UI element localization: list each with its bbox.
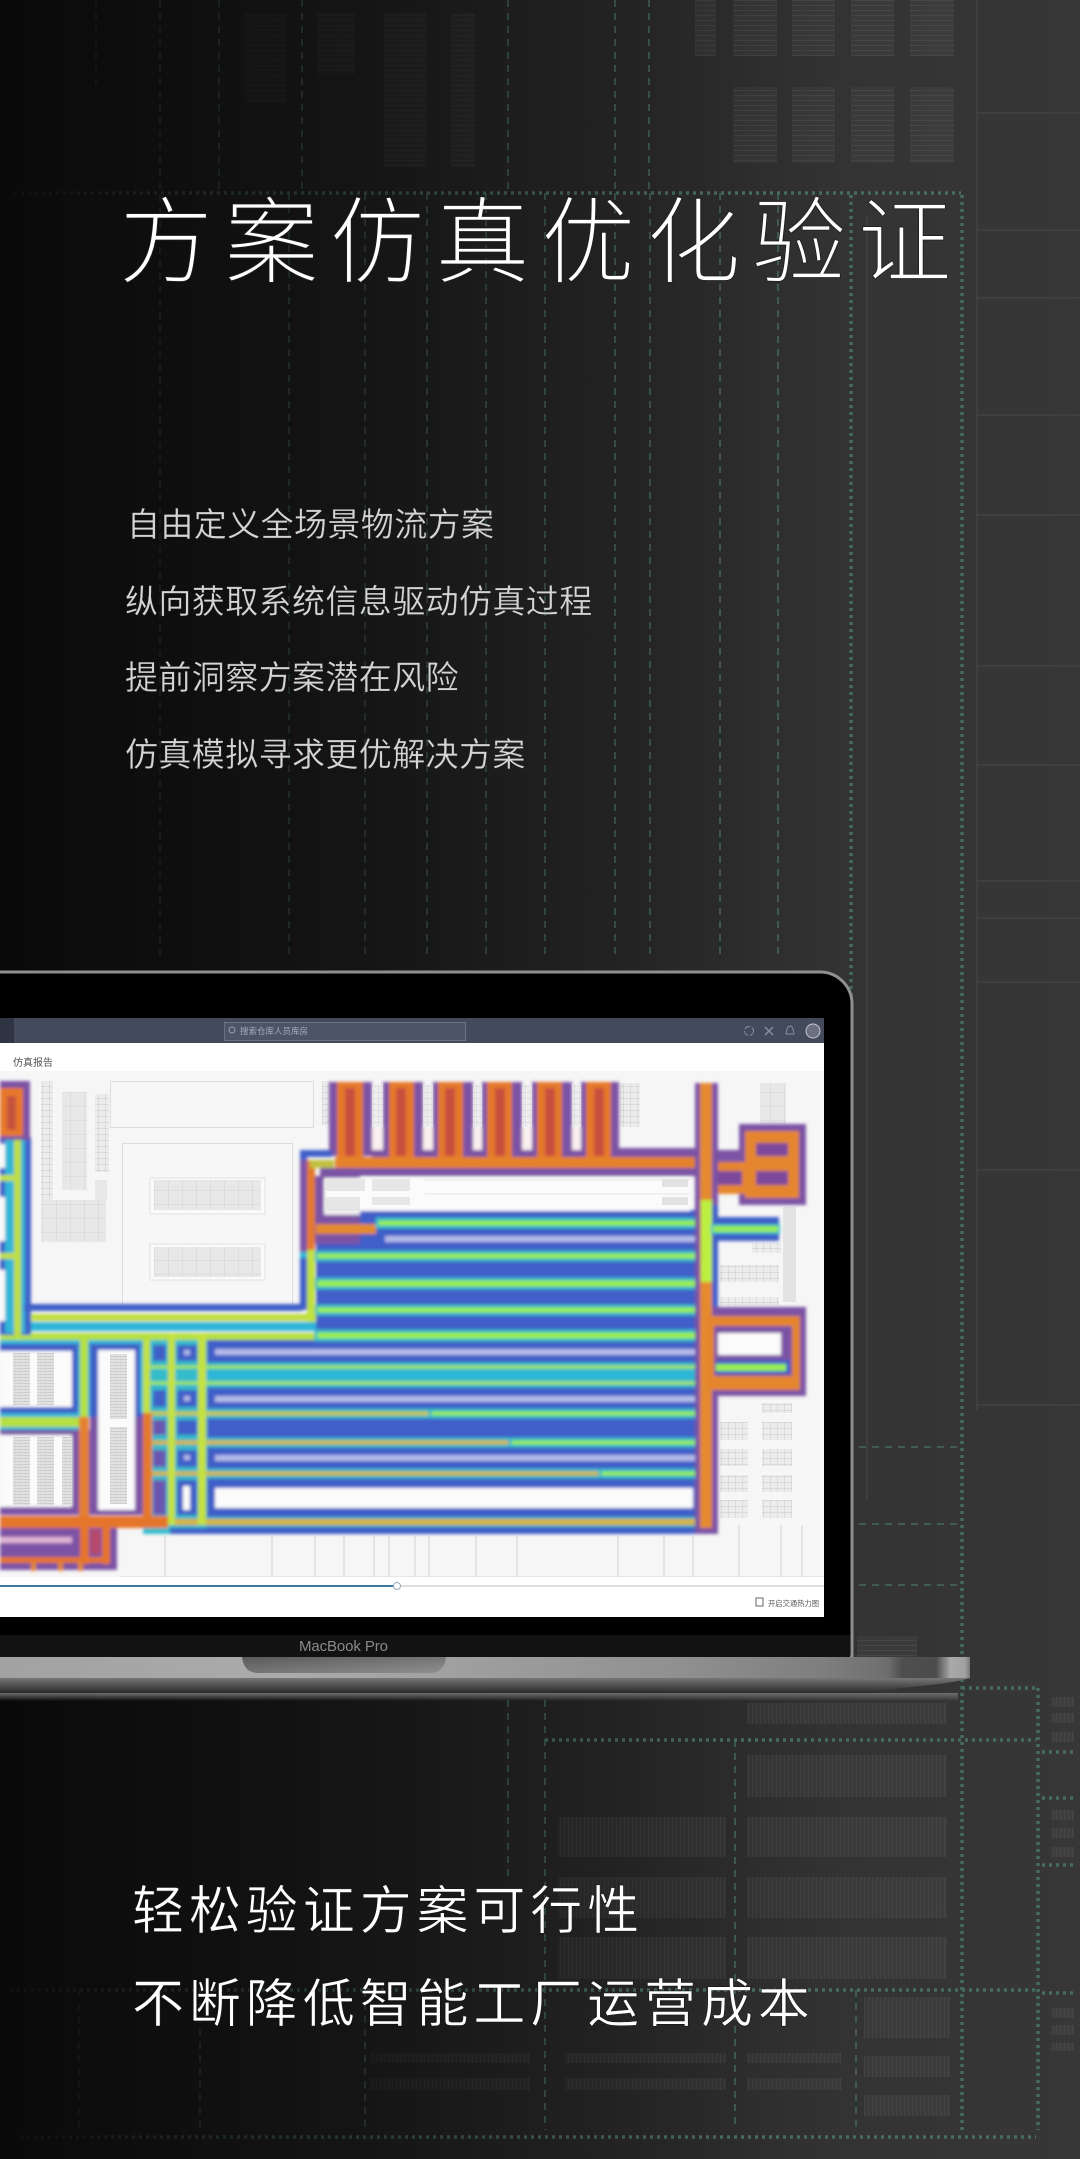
laptop lid bbox=[0, 972, 852, 1657]
laptop base bbox=[0, 1657, 970, 1701]
floor plan grid blocks bbox=[41, 1081, 824, 1577]
feature line 4: 仿真模拟寻求更优解决方案 bbox=[125, 736, 526, 773]
feature line 2: 纵向获取系统信息驱动仿真过程 bbox=[125, 583, 593, 620]
upper stripes block bbox=[300, 1176, 707, 1340]
closing line 1: 轻松验证方案可行性 bbox=[132, 1883, 644, 1941]
right mid box bbox=[706, 1307, 806, 1396]
feature line 1: 自由定义全场景物流方案 bbox=[127, 506, 494, 543]
closing line 2: 不断降低智能工厂运营成本 bbox=[132, 1976, 815, 2034]
app top bar bbox=[0, 1018, 824, 1043]
trackpad notch bbox=[242, 1657, 446, 1673]
comb of orange teeth bbox=[320, 1082, 715, 1176]
heatmap overlay bbox=[0, 1081, 806, 1571]
left column bbox=[0, 1081, 31, 1335]
top bar icons bbox=[744, 1024, 820, 1038]
bottom left orange band bbox=[0, 1516, 168, 1571]
search box: 搜索仓库人员库房 bbox=[240, 1026, 308, 1036]
brand label: MacBook Pro bbox=[299, 1638, 388, 1655]
heat toggle checkbox: 开启交通热力图 bbox=[768, 1599, 819, 1608]
white floor islands bbox=[0, 1350, 135, 1510]
feature line 3: 提前洞察方案潜在风险 bbox=[125, 659, 459, 696]
long blue border under white area bbox=[24, 1150, 334, 1322]
right top box bbox=[712, 1124, 806, 1205]
closing statement bbox=[132, 1883, 815, 2034]
text block: feature list bbox=[125, 506, 593, 773]
title: 方案仿真优化验证 bbox=[119, 190, 963, 295]
search box bbox=[224, 1022, 466, 1040]
app content panel bbox=[0, 1043, 824, 1617]
lower stripes block bbox=[0, 1314, 707, 1534]
connector verticals bbox=[153, 1333, 206, 1525]
storage racks inside white islands bbox=[13, 1084, 690, 1505]
lower left region bbox=[0, 1340, 152, 1525]
tab label: 仿真报告 bbox=[13, 1056, 53, 1069]
slider control bbox=[0, 1582, 824, 1590]
laptop mockup with heatmap screen bbox=[0, 970, 970, 1700]
right vertical artery bbox=[695, 1083, 779, 1534]
